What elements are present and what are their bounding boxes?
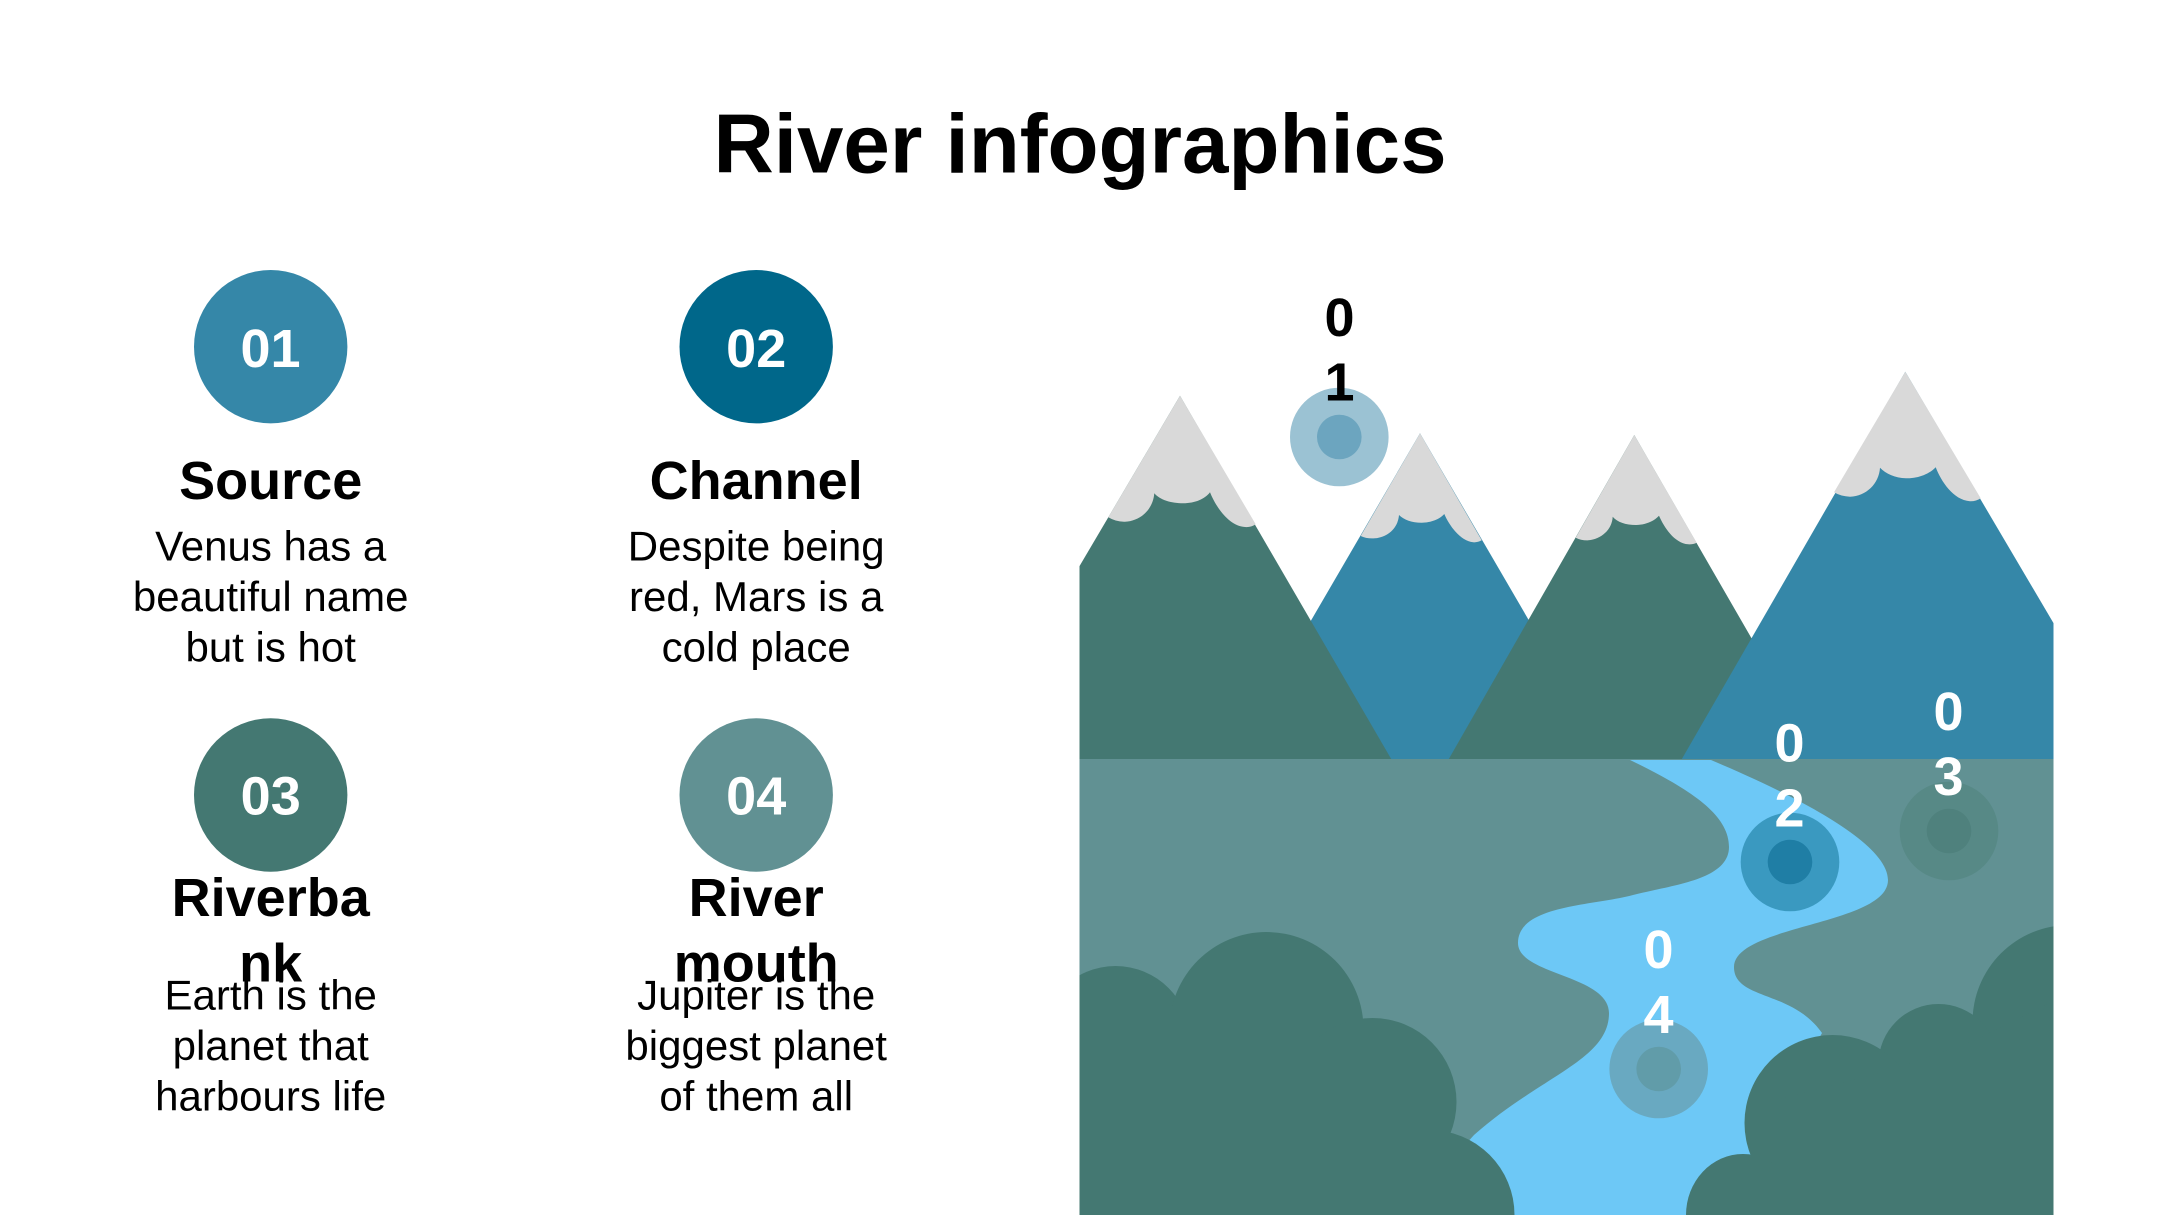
heading: Channel: Channel [650,451,863,511]
number badge 02: 02 [726,319,786,379]
right bushes [1686,926,2054,1215]
left bushes [1040,932,1514,1215]
callout number 01: 0 [1324,288,1355,348]
text: Channel description: Despite being [628,523,885,570]
river landscape illustration [1080,372,2054,1215]
number badge 03: 03 [241,767,301,827]
heading: Riverbank: nk [239,934,303,994]
text: River mouth description: of them all [659,1073,853,1120]
text: River mouth description: Jupiter is the [637,972,875,1018]
panel: 02 Channel [628,270,885,671]
text: Riverbank description: Earth is the [164,972,377,1018]
callout marker 04 [1609,1020,1708,1118]
text: Riverbank description: planet that [173,1022,369,1069]
callout number 01: 1 [1324,352,1355,412]
callout number 03: 3 [1933,747,1964,807]
heading: River mouth: mouth [674,934,839,994]
number badge 01: 01 [240,319,301,379]
heading: Riverbank: Riverba [172,868,371,928]
number badge 04: 04 [726,767,786,827]
text: Channel description: cold place [662,624,851,671]
text: River mouth description: biggest planet [625,1022,887,1069]
mountain 4 [1676,372,2054,770]
panel: 01 Source [133,270,408,671]
callout marker 01 [1290,388,1389,486]
callout number 03: 0 [1933,682,1964,742]
text: Source description: but is hot [185,624,356,671]
river body [1470,760,1888,1215]
heading: Source: Source [179,451,362,511]
callout number 02: 2 [1774,778,1805,838]
callout number 04: 4 [1643,985,1674,1045]
text: Source description: Venus has a [155,523,387,570]
ground [1080,759,2054,1140]
text: Channel description: red, Mars is a [629,573,884,620]
text: Riverbank description: harbours life [155,1073,386,1120]
heading: River mouth: River [689,868,824,928]
callout number 02: 0 [1774,714,1805,774]
title: River infographics [713,96,1447,190]
callout number 04: 0 [1643,920,1674,980]
callout marker 02 [1741,813,1839,911]
number badge 01 [194,270,347,423]
panel: 04 River mouth [625,718,887,1120]
callout marker 03 [1900,782,1998,880]
mountain 1 [1079,396,1398,770]
number badge 03 [194,718,347,872]
number badge 04 [680,718,833,872]
mountain 3 [1448,435,1752,759]
panel: 03 Riverbank [155,718,386,1120]
number badge 02 [680,270,833,423]
text: Source description: beautiful name [133,573,408,620]
mountain 2 [1310,433,1528,759]
